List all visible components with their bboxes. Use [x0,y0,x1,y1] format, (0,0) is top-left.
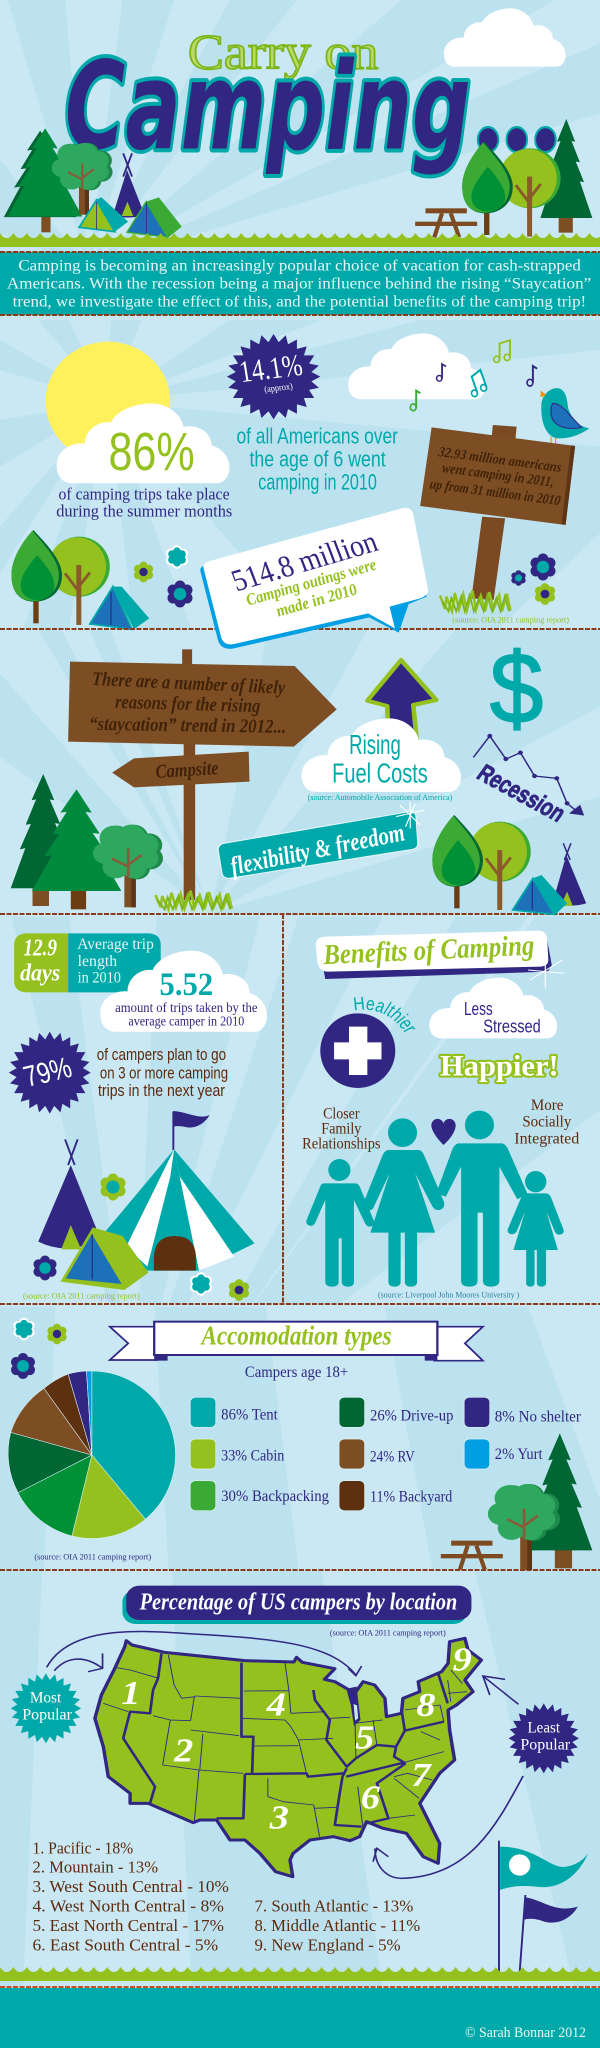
illustration: tipi [553,843,586,906]
pie chart [8,1371,175,1538]
icon: sun [46,342,170,462]
label: closer family relationships: Relationships [302,1134,381,1152]
heading pill [122,1586,471,1624]
panel: accommodation types [8,1321,592,1570]
legend list: 3. West South Central - 10% [33,1877,229,1897]
illustration: right pine tree [540,119,592,233]
legend: 11% Backyard [370,1488,453,1505]
ribbon heading: Accomodation types [200,1321,392,1351]
illustration: blue tent [90,587,149,629]
signpost: reasons for the rising [115,690,261,717]
intro text line 1: Camping is becoming an increasingly popular choice of vacation for cash-strapped [18,257,582,274]
cloud: 5.52 trips [100,951,267,1032]
cloud: less stressed: Stressed [483,1017,541,1037]
stat box: 12.9 days: length [78,952,117,970]
wooden sign: went camping in 2011, [441,461,555,490]
callout: 514.8 million speech bubble: 514.8 million [227,525,382,598]
icon: flags [499,1841,588,1973]
legend: 86% Tent [221,1406,278,1423]
map of the United States [95,1638,481,1877]
caption: campers plan [97,1045,228,1100]
legend list: 1. Pacific - 18% [33,1838,133,1858]
badge: 14.1%: 14.1% [237,349,305,390]
illustration: round tree [488,1484,560,1570]
stat box: 12.9 days: days [20,959,60,986]
badge: 14.1% [227,334,320,419]
map of the United States: 2 [173,1732,193,1769]
icon: health cross [320,1013,395,1088]
icon: rising arrow [367,660,436,743]
title: ellipsis dots: ... [474,25,560,180]
heading banner: Benefits of Camping [322,929,535,971]
badge: least popular: Popular [520,1735,571,1753]
map of the United States: 6 [361,1779,380,1816]
caption: campers plan: on 3 or more camping [100,1063,228,1082]
caption: all Americans: camping in 2010 [258,471,377,495]
footer grass strip [0,1967,600,1981]
badge: 79%: 79% [19,1050,76,1093]
label: rising fuel costs [332,730,428,789]
stat: 86%: 86% [108,423,195,482]
banner: flexibility and freedom: flexibility & freedom [227,818,408,880]
icon: heart [431,1119,456,1145]
ribbon heading [110,1321,483,1361]
caption: all Americans: the age of 6 went [249,448,386,472]
callout: 514.8 million speech bubble: Camping outings were [243,555,379,609]
caption: camping trips: of camping trips take place [59,484,230,503]
legend: 2% Yurt [495,1445,543,1463]
legend: 24% RV [370,1447,415,1465]
map of the United States: 1 [121,1674,140,1711]
illustration: left pine tree [4,128,82,232]
signpost: There are a number of likely [91,667,286,698]
illustration: pine trees [11,774,121,909]
caption: camping trips [56,484,232,520]
map of the United States: 4 [266,1686,286,1723]
map of the United States: 7 [411,1756,433,1793]
callout: 514.8 million speech bubble: made in 2010 [273,580,360,620]
source note: (source: OIA 2011 camping report) [34,1552,151,1561]
cloud: less stressed: Less [464,999,493,1020]
heading pill: Percentage of US campers by location [139,1588,457,1615]
illustration: picnic table [415,208,477,237]
panel: US map [11,1586,588,1973]
cloud: 5.52 trips: amount of trips taken by the [115,1001,258,1016]
flowers [11,545,555,1379]
label: happier: Happier! [440,1049,559,1082]
label: closer family relationships: Closer [323,1104,360,1122]
legend list: 2. Mountain - 13% [33,1858,158,1877]
illustration: trees [11,530,110,625]
label: more socially integrated: Integrated [514,1129,580,1147]
grass strip [0,233,600,247]
legend: 30% Backpacking [221,1487,329,1505]
source note: (source: OIA 2011 camping report) [330,1628,446,1637]
intro text line 3: trend, we investigate the effect of this, and the potential benefits of the camping trip! [13,293,586,310]
source note: (source: Automobile Association of America) [308,793,452,802]
stat box: 12.9 days: in 2010 [78,969,121,986]
illustration: tipi [113,153,145,217]
wooden sign: 32.93 million americans [436,445,563,476]
map of the United States: 9 [453,1641,472,1678]
legend list: 6. East South Central - 5% [33,1935,218,1955]
caption: camping trips: during the summer months [56,502,232,520]
illustration: pine tree [527,1433,592,1568]
map of the United States: 8 [416,1686,436,1723]
label: closer family relationships: Family [321,1119,362,1137]
cloud: 5.52 trips: average camper in 2010 [128,1014,244,1029]
wooden sign [420,425,575,600]
signpost: “staycation” trend in 2012... [89,712,286,737]
illustration: tipi [38,1139,100,1249]
illustration: green tent [60,1227,148,1290]
label: more socially integrated [514,1096,580,1147]
label: rising fuel costs: Rising [349,730,401,761]
icon: music cloud [348,333,485,399]
illustration: striped tent [105,1111,254,1271]
source note: (source: Liverpool John Moores University ) [378,1290,519,1299]
caption: all Americans: of all Americans over [236,425,398,449]
callout: 514.8 million speech bubble [200,508,428,649]
legend list: 9. New England - 5% [254,1935,401,1955]
illustration: round tree [93,825,163,907]
illustration: trees [432,815,531,910]
illustration: round tree [52,143,113,215]
caption: campers plan: trips in the next year [98,1081,225,1100]
panel: summer statistics [11,333,589,629]
arrows [47,1631,523,1878]
illustration: picnic table [441,1541,503,1570]
icon: grass tuft [155,891,232,909]
intro panel [0,252,600,315]
legend list [33,1838,420,1955]
illustration: green tent [127,197,182,237]
label: more socially integrated: Socially [522,1113,572,1130]
label: healthier: Healthier [354,996,416,1032]
stat box: 12.9 days [14,933,161,992]
illustration: teal tent [79,197,128,232]
label: rising fuel costs: Fuel Costs [332,759,428,789]
icon: fuel cloud [302,718,461,792]
badge: least popular [509,1703,579,1773]
badge: most popular: Most [30,1689,62,1706]
icons: music notes [410,340,537,411]
icon: family figures [306,1111,564,1287]
source note: (source: OIA 2011 camping report) [23,1291,140,1300]
legend: 26% Drive-up [370,1407,453,1424]
icon: bluebird [541,388,589,447]
map of the United States: 3 [269,1799,289,1836]
cloud: 5.52 trips: 5.52 [160,966,213,1002]
icon: grass tuft [440,591,510,611]
legend list: 4. West North Central - 8% [33,1897,224,1916]
chart: recession line [473,734,584,815]
signpost [68,649,337,900]
legend: 33% Cabin [221,1446,285,1464]
legend [190,1397,581,1511]
label: more socially integrated: More [531,1096,563,1114]
panel: benefits of camping [302,929,580,1300]
legend list: 5. East North Central - 17% [33,1916,224,1936]
illustration: tent [513,875,567,915]
legend: 8% No shelter [495,1408,581,1425]
legend list: 8. Middle Atlantic - 11% [254,1916,420,1936]
badge: 79% [9,1032,91,1114]
intro text line 2: Americans. With the recession being a major influence behind the rising “Staycation” [7,275,591,292]
title: Carry on: Carry on [188,24,379,79]
cloud: less stressed [429,978,557,1038]
icon: dollar: $ [490,633,543,744]
illustration: leaf and round trees [462,142,561,237]
map of the United States: 5 [355,1719,374,1756]
stat box: 12.9 days: 12.9 [23,934,57,961]
footer band [0,1987,600,2048]
heading banner [316,929,564,988]
caption: campers plan: of campers plan to go [97,1045,226,1064]
header illustration and title [4,8,592,237]
badge: least popular: Least [527,1719,560,1736]
label: closer family relationships [302,1104,381,1152]
icon: cloud top right [444,8,566,67]
panel: staycation reasons [11,633,586,915]
source note: (source: OIA 2011 camping report) [452,615,569,625]
badge: most popular: Popular [22,1705,72,1723]
icon: cloud behind 86% [57,403,230,483]
panel: trip statistics [9,933,267,1300]
legend list: 7. South Atlantic - 13% [254,1897,413,1916]
subheading: Campers age 18+ [245,1363,348,1381]
signpost: Campsite [155,756,219,783]
badge: 14.1%: (approx) [264,382,294,395]
copyright: © Sarah Bonnar 2012 [465,2025,586,2041]
badge: most popular [11,1673,81,1743]
stat box: 12.9 days: Average trip [77,935,154,953]
caption: all Americans [236,425,398,495]
